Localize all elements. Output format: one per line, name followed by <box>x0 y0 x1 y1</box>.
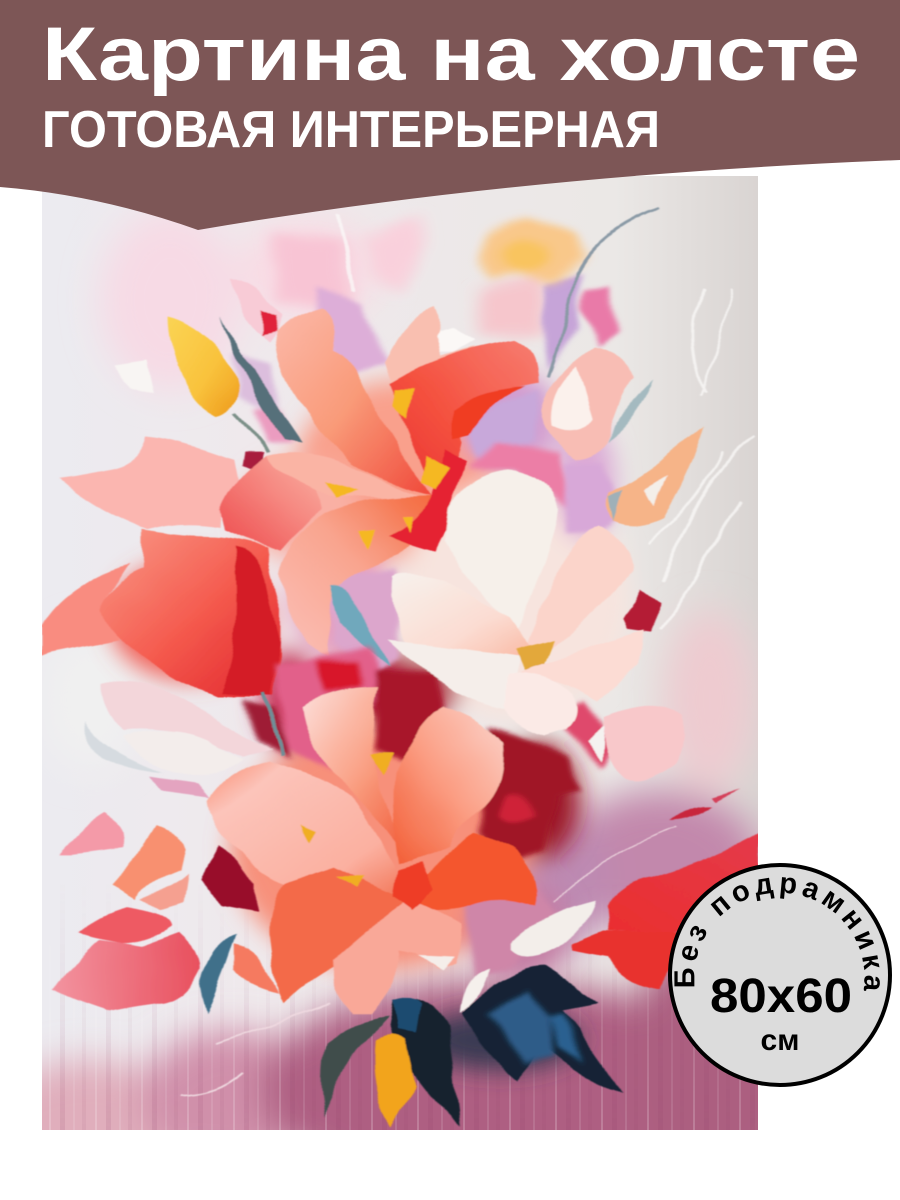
red fleck <box>260 309 277 336</box>
white lily: bottom petal <box>503 672 578 737</box>
lily left petal <box>209 762 412 907</box>
stamens upper lily <box>327 389 448 549</box>
lily bottom petal <box>332 900 462 1013</box>
red petal right <box>606 833 758 933</box>
orange petals <box>110 827 184 900</box>
lily red heart <box>389 449 467 553</box>
pink petal left <box>60 436 238 529</box>
colour washes <box>270 213 544 336</box>
white fleck left <box>113 361 154 393</box>
lily top-left petal <box>302 687 412 863</box>
lily left petal lobe <box>220 456 321 549</box>
orange glow <box>480 216 585 286</box>
lily heart <box>394 863 435 910</box>
white fleck bud <box>585 725 604 762</box>
subtitle: ГОТОВАЯ ИНТЕРЬЕРНАЯ <box>42 101 660 159</box>
pale petal left <box>101 681 270 757</box>
painting background wash <box>42 176 758 1130</box>
ruffled peach petal <box>384 306 476 389</box>
white lily: lower left petal <box>389 640 521 710</box>
leaf top left <box>220 316 302 443</box>
lily left petal <box>266 453 430 499</box>
pink-red petals left <box>79 907 172 943</box>
lavender and pink paint <box>234 273 622 676</box>
tulip body <box>101 529 279 696</box>
pink and dark red mass <box>243 647 613 977</box>
white petal left <box>124 731 243 775</box>
dark leaves right <box>462 967 622 1093</box>
blue leaf left <box>200 933 236 1013</box>
lily right orange petal <box>403 833 537 910</box>
badge curved label: Без подрамника <box>674 877 880 991</box>
blue grey leaf right <box>606 379 654 443</box>
header banner <box>0 0 900 230</box>
small pink petal top <box>231 278 284 343</box>
white palette strokes <box>339 216 754 629</box>
white lily: right petal <box>517 629 645 700</box>
pink smear <box>152 777 211 797</box>
red core upper <box>453 386 526 439</box>
lily upper left petal <box>275 308 430 496</box>
title: Картина на холсте <box>42 12 860 97</box>
blue leaf centre <box>330 586 389 666</box>
painting lower half <box>51 629 758 1127</box>
stamens lower lily <box>300 753 394 888</box>
dark red right <box>622 589 658 633</box>
tulip red fold <box>220 546 279 696</box>
bud stem <box>236 413 268 453</box>
colour underlay behind flowers <box>110 370 630 1070</box>
white drag strokes <box>179 827 677 1097</box>
grey sweep <box>83 720 165 773</box>
badge: size <box>668 863 892 1087</box>
white lily heart <box>517 640 553 670</box>
orange bud right <box>607 426 704 527</box>
lily dark red left <box>202 847 257 913</box>
lily lower-left petal <box>269 867 407 1003</box>
white petal bottom of lily <box>419 955 455 972</box>
painting: floral canvas <box>42 176 758 1130</box>
white lily: upper right petal <box>526 526 631 656</box>
pink bud right <box>603 706 685 781</box>
pink bud right <box>540 346 636 459</box>
white lily: left petal <box>393 573 540 659</box>
pink petal small <box>60 813 124 853</box>
red flicks <box>670 805 713 820</box>
badge size value: 80x60 <box>710 970 852 1023</box>
tulip stem <box>263 690 284 757</box>
dark leaf left <box>321 1017 389 1117</box>
white small bud <box>460 967 489 1013</box>
lily top-right petal <box>392 707 504 863</box>
dark red fleck <box>241 453 263 473</box>
painting upper half <box>42 208 754 696</box>
white bud <box>512 902 594 957</box>
stem upper right <box>549 208 658 376</box>
yellow bud top <box>168 316 238 416</box>
lily lower left petal <box>279 496 432 656</box>
white fleck top <box>437 328 474 352</box>
yellow bud bottom <box>374 1035 416 1127</box>
dark leaf centre <box>389 998 460 1127</box>
badge unit: см <box>761 1024 799 1057</box>
lily left lobe <box>234 943 279 993</box>
tulip outer petal <box>42 564 129 656</box>
lily upper right petal <box>388 340 540 472</box>
white lily: top petal <box>444 469 558 629</box>
